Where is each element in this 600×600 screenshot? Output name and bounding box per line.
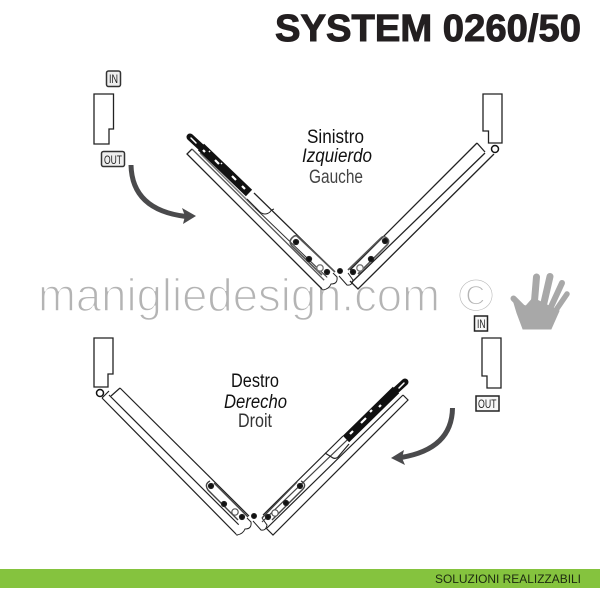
label: Derecho: Derecho (224, 392, 287, 413)
lock slot and screws (348, 237, 389, 274)
slot and screws (262, 481, 305, 520)
label: IN: IN (109, 72, 118, 86)
title: SYSTEM 0260/50 (275, 8, 581, 50)
faceplate (346, 382, 405, 439)
faceplate (190, 137, 249, 193)
corner hinge bottom (234, 514, 267, 535)
arrow (131, 165, 196, 224)
bottom left profile (94, 338, 113, 387)
footer text: SOLUZIONI REALIZZABILI (435, 572, 581, 586)
label: OUT: OUT (478, 397, 497, 411)
label: OUT (102, 152, 124, 167)
hinge (492, 146, 498, 152)
frame profile (94, 94, 114, 144)
lock slot and screws (290, 236, 335, 275)
label: OUT: OUT (104, 153, 122, 167)
left sash top (187, 137, 335, 290)
label: Izquierdo: Izquierdo (302, 146, 372, 167)
arrow (391, 408, 452, 465)
pocket (247, 199, 274, 214)
corner hinge top (320, 268, 353, 290)
right sash bottom (262, 382, 408, 535)
label: Droit: Droit (238, 411, 273, 432)
watermark: manigliedesign.com (38, 269, 440, 321)
label: Destro: Destro (231, 371, 279, 392)
icon: hand (514, 276, 567, 329)
watermark: © (458, 269, 494, 321)
label: Sinistro: Sinistro (307, 127, 364, 148)
frame profile (482, 338, 501, 388)
left sash bottom (96, 388, 249, 535)
label: Gauche: Gauche (309, 167, 363, 188)
label: IN: IN (477, 317, 486, 331)
strip (187, 149, 323, 290)
pocket (325, 444, 349, 458)
body edge (254, 193, 333, 270)
right sash top (348, 143, 498, 289)
label: IN (474, 316, 488, 331)
top right profile (483, 94, 502, 143)
top left profile group (94, 71, 196, 224)
green footer bar (0, 569, 600, 588)
bottom right profile group (391, 316, 501, 465)
